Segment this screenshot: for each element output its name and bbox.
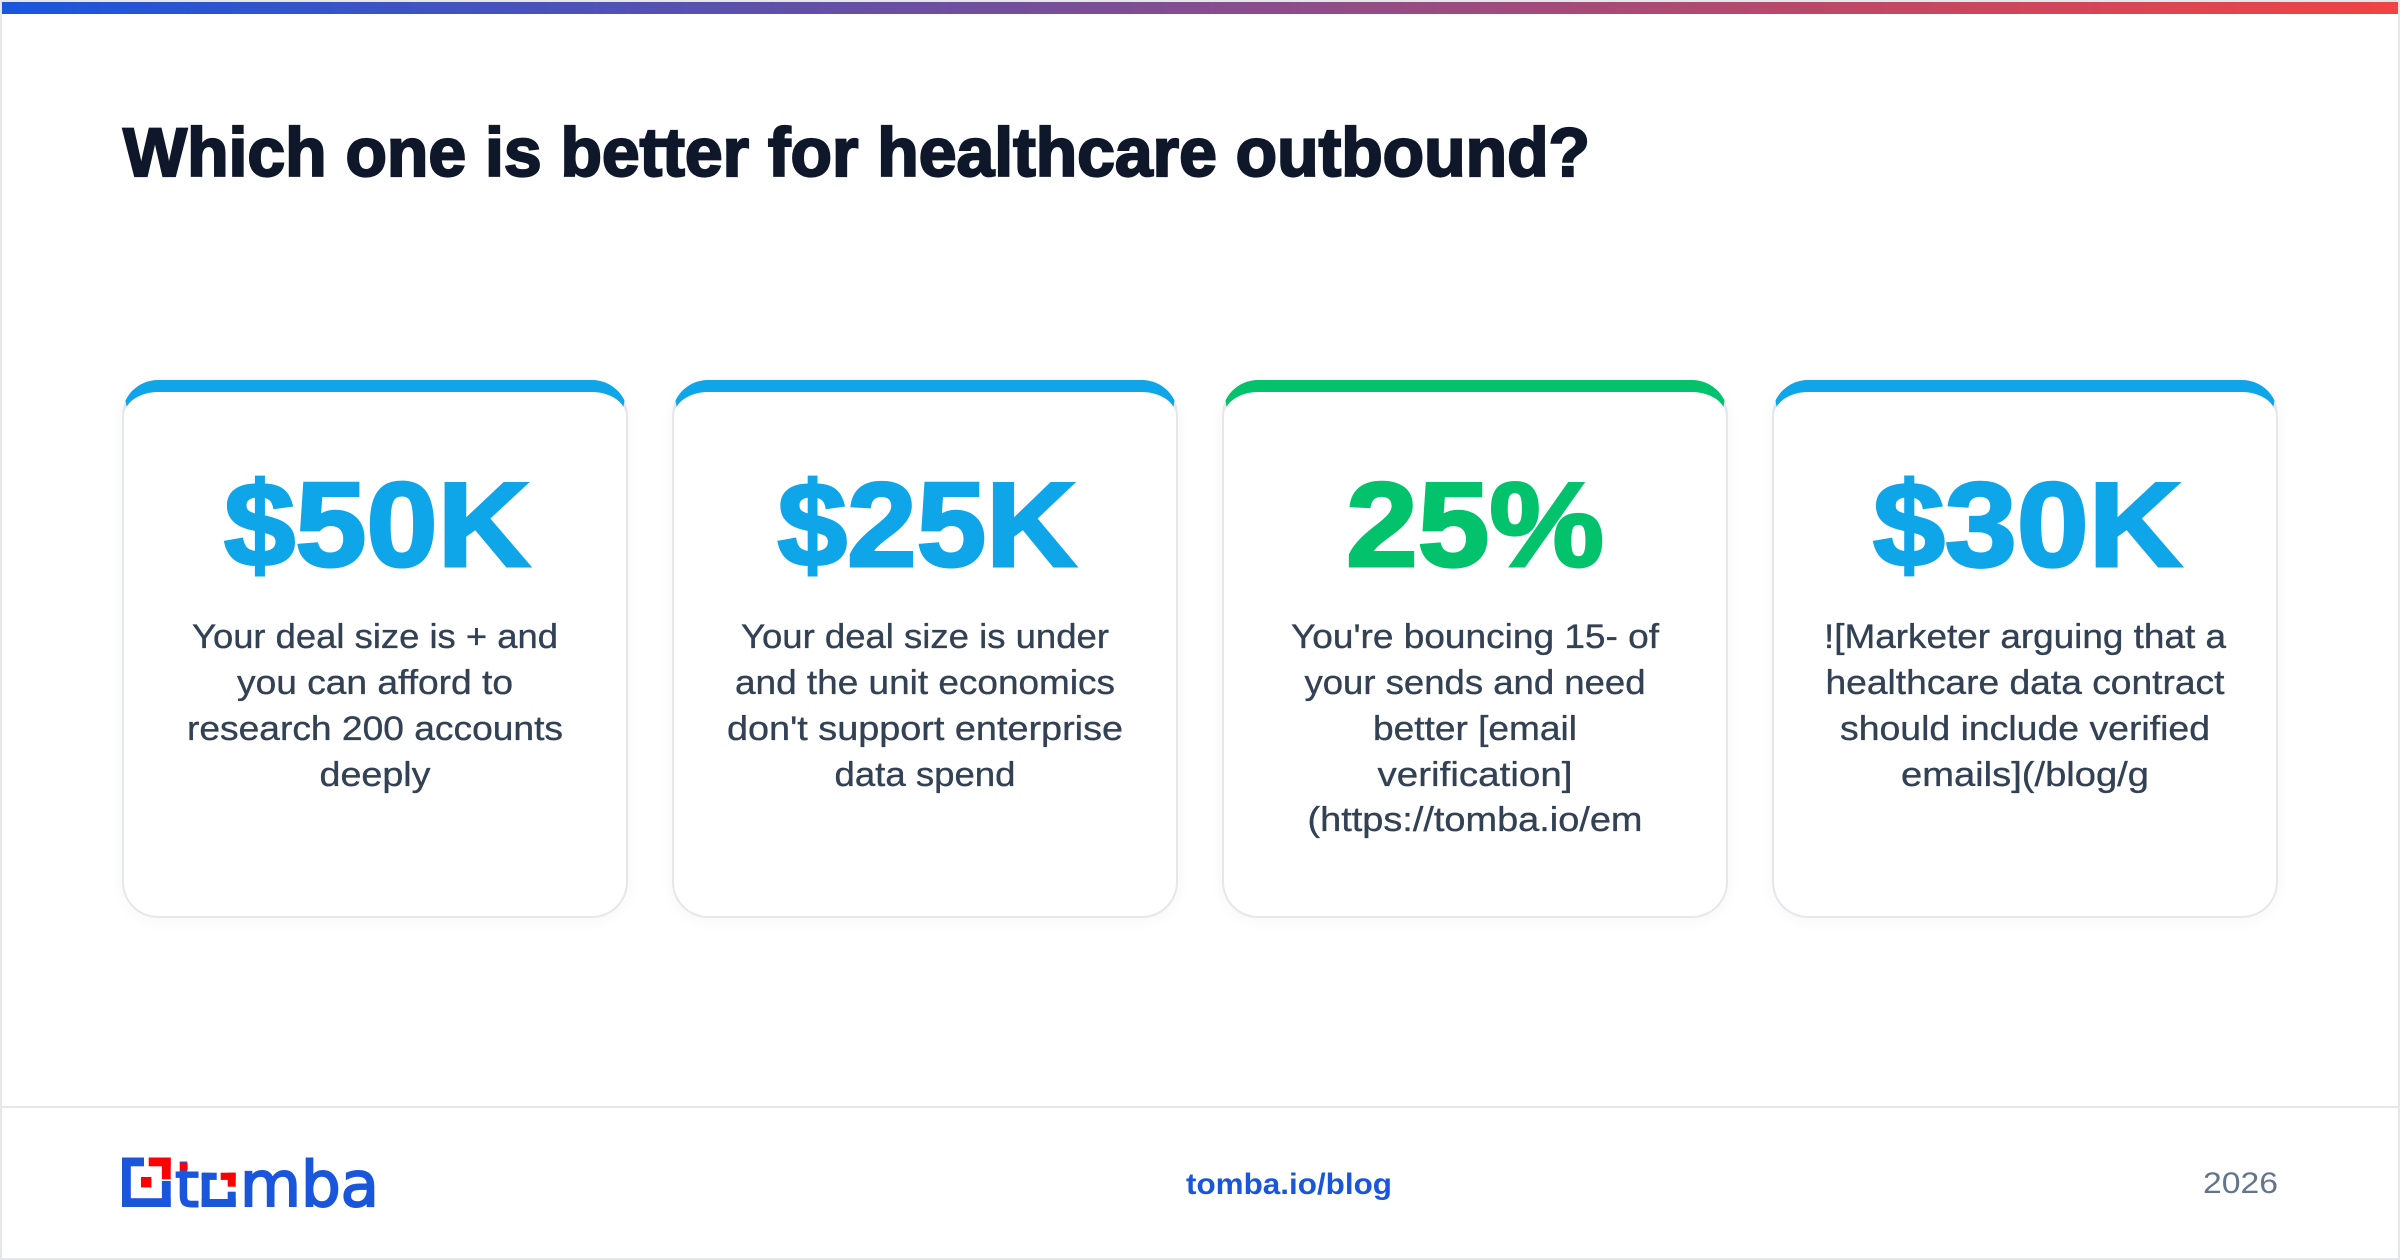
icon: stylised square letter o <box>202 1173 236 1207</box>
description text: ![Marketer arguing that a <box>1824 618 2226 656</box>
description text: don't support enterprise <box>727 710 1123 748</box>
footer <box>122 1148 2278 1222</box>
description text: deeply <box>320 756 430 794</box>
description text <box>187 618 563 794</box>
description text: better [email <box>1373 710 1577 748</box>
panel: card $50K <box>122 380 628 918</box>
stat: $50K: $50K <box>224 458 530 592</box>
title: Which one is better for healthcare outbound? <box>123 114 1590 191</box>
description text: verification] <box>1378 756 1572 794</box>
stat: 25%: 25% <box>1346 458 1604 592</box>
description text: your sends and need <box>1304 664 1646 702</box>
footer year: 2026 <box>2203 1167 2278 1200</box>
footer divider <box>2 1106 2398 1108</box>
description text <box>727 618 1123 794</box>
description text: You're bouncing 15- of <box>1291 618 1660 656</box>
panel: card $25K <box>672 380 1178 918</box>
description text: (https://tomba.io/em <box>1308 801 1642 839</box>
stat: $30K: $30K <box>1873 458 2182 592</box>
panel: card 25% <box>1222 380 1728 918</box>
description text <box>1291 618 1660 839</box>
logo: tomba <box>122 1148 379 1222</box>
description text: and the unit economics <box>735 664 1115 702</box>
description text <box>1824 618 2226 794</box>
description text: should include verified <box>1840 710 2210 748</box>
icon: square mark <box>122 1158 171 1207</box>
icon: red dot of t <box>180 1163 188 1170</box>
top gradient bar <box>2 2 2398 14</box>
description text: you can afford to <box>237 664 513 702</box>
panel: card $30K <box>1772 380 2278 918</box>
stat: $25K: $25K <box>778 458 1076 592</box>
footer link: tomba.io/blog <box>1186 1168 1392 1201</box>
description text: emails](/blog/g <box>1901 756 2149 794</box>
wordmark letter t: t <box>175 1148 199 1222</box>
description text: data spend <box>834 756 1016 794</box>
description text: Your deal size is + and <box>192 618 558 656</box>
description text: Your deal size is under <box>741 618 1109 656</box>
wordmark letters mba: mba <box>240 1148 379 1221</box>
description text: healthcare data contract <box>1826 664 2225 702</box>
description text: research 200 accounts <box>187 710 563 748</box>
